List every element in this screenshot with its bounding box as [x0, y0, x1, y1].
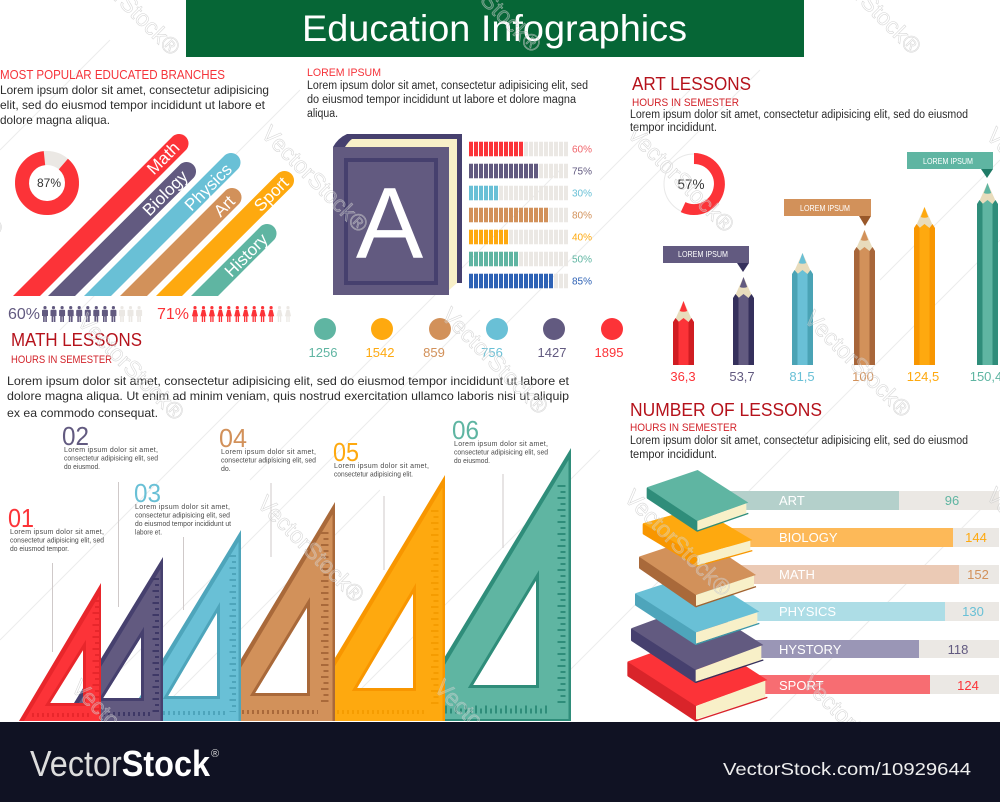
bar: hystory 118	[720, 640, 999, 658]
pencil: 81,5	[792, 253, 813, 365]
bar row 85%	[469, 276, 592, 288]
pencil: 53,7	[733, 277, 754, 365]
text block: number of lessons: tempor incididunt.	[630, 449, 717, 461]
bar: biology 144	[720, 528, 999, 547]
step 06: Lorem ipsum dolor sit amet,	[454, 441, 548, 448]
step 01	[8, 503, 104, 553]
panel: number of lessons	[627, 399, 999, 721]
step 06	[452, 415, 548, 465]
bar: hystory 118: HYSTORY	[779, 642, 842, 657]
watermarks: VectorStock®	[799, 305, 917, 422]
bar: hystory 118: 118	[948, 642, 968, 657]
subheading: hours in semester: HOURS IN SEMESTER	[632, 97, 739, 109]
pencil: 150,4	[977, 183, 998, 365]
bar: math 152: 152	[967, 567, 989, 582]
bar: sport 124	[720, 675, 999, 694]
pencil value labels: 100	[852, 369, 874, 384]
step 01: consectetur adipisicing elit, sed	[10, 538, 104, 544]
step 01: Lorem ipsum dolor sit amet,	[10, 529, 104, 536]
bar: biology	[48, 162, 196, 296]
step 01: 01	[8, 503, 34, 533]
bar: math 152	[720, 565, 999, 584]
bar: sport: Sport	[250, 173, 293, 215]
logo: vectorstock: VectorStock	[30, 743, 211, 784]
people stat: 71%: 71%	[157, 306, 189, 323]
stat dots with numbers	[309, 318, 623, 360]
text block: branches: Lorem ipsum dolor sit amet, consectetur adipisicing	[0, 83, 269, 97]
callout: teal lorem ipsum	[907, 152, 993, 178]
text block: branches	[0, 83, 269, 127]
heading: math lessons: MATH LESSONS	[11, 329, 142, 350]
step 03	[134, 478, 231, 536]
text block: lorem ipsum: aliqua.	[307, 108, 338, 120]
people stat: 71%	[157, 306, 291, 323]
text block: number of lessons: Lorem ipsum dolor sit amet, consectetur adipisicing elit, sed do eiusmod	[630, 435, 968, 447]
text block: math lessons: dolore magna aliqua. Ut enim ad minim veniam, quis nostrud exercitation ullamco laboris nisi ut aliquip	[7, 389, 569, 403]
bar: history: History	[221, 230, 272, 281]
donut chart: 57%: 57%	[677, 177, 705, 192]
heading: number of lessons: NUMBER OF LESSONS	[630, 399, 822, 420]
step 02	[62, 421, 158, 471]
book teal	[647, 470, 748, 531]
bar: math 152: MATH	[779, 567, 815, 582]
stat dots with numbers: 1542	[366, 345, 394, 360]
watermarks: VectorStock®	[436, 302, 554, 419]
book orange	[643, 508, 752, 566]
book purple	[631, 603, 763, 682]
step 02: 02	[62, 421, 89, 451]
bar row 80%: 80%	[572, 210, 592, 222]
donut chart: 57%	[664, 154, 724, 214]
step 06: 06	[452, 415, 479, 445]
bar: art 96: ART	[779, 493, 805, 508]
panel: lorem ipsum book	[307, 67, 623, 360]
stat dots with numbers: 1427	[538, 345, 566, 360]
step 04: do.	[221, 466, 231, 473]
stat dots with numbers: 1256	[309, 345, 337, 360]
bar row 30%	[469, 188, 592, 200]
bar: physics 130	[720, 602, 999, 621]
bar row 40%	[469, 232, 592, 244]
pencil: 124,5	[914, 207, 935, 365]
bar row 75%: 75%	[572, 166, 592, 178]
subheading: hours in semester: HOURS IN SEMESTER	[630, 422, 737, 434]
text block: art lessons: tempor incididunt.	[630, 122, 717, 134]
step 02: Lorem ipsum dolor sit amet,	[64, 447, 158, 454]
step 05: Lorem ipsum dolor sit amet,	[334, 463, 429, 470]
bar: history	[191, 224, 277, 296]
bar: art 96: 96	[945, 493, 959, 508]
heading: art lessons: ART LESSONS	[632, 73, 751, 94]
chart: segmented progress bars	[469, 144, 592, 288]
pencil value labels: 81,5	[789, 369, 815, 384]
text block: lorem ipsum	[307, 80, 588, 120]
step 03: Lorem ipsum dolor sit amet,	[135, 504, 230, 511]
bar: math	[13, 134, 189, 296]
bar row 40%: 40%	[572, 232, 592, 244]
people stat: 60%	[8, 306, 142, 323]
title banner	[186, 0, 804, 57]
leader lines	[52, 474, 503, 652]
bar: sport 124: 124	[957, 678, 979, 693]
callout: purple lorem ipsum	[663, 246, 749, 272]
book blue	[635, 573, 759, 644]
callout: purple lorem ipsum: LOREM IPSUM	[678, 249, 728, 259]
bar: biology 144: BIOLOGY	[779, 530, 838, 545]
step 05: consectetur adipisicing elit.	[334, 472, 413, 478]
step 03: labore et.	[135, 530, 162, 536]
step 04: consectetur adipisicing elit, sed	[221, 458, 316, 464]
bar: art	[120, 188, 242, 296]
callout: brown lorem ipsum	[784, 199, 871, 226]
set square 04 brown	[204, 502, 335, 721]
bar: physics 130: PHYSICS	[779, 604, 836, 619]
text block: art lessons	[630, 109, 968, 134]
bar: biology: Biology	[139, 167, 192, 220]
bar: sport 124: SPORT	[779, 678, 824, 693]
watermarks: VectorStock®	[619, 484, 737, 601]
icon: book with letter A	[333, 134, 462, 295]
bar: art 96	[720, 491, 999, 510]
watermarks: VectorStock®	[72, 308, 190, 425]
registered mark: ®	[211, 748, 219, 760]
image id: VectorStock.com/10929644	[723, 759, 971, 779]
text block: math lessons	[7, 374, 570, 420]
step 04: 04	[219, 423, 247, 453]
watermarks: VectorStock®	[256, 120, 374, 237]
watermarks: VectorStock®	[252, 490, 370, 607]
watermarks: VectorStock®	[66, 674, 184, 791]
watermarks: VectorStock®	[797, 669, 915, 786]
text block: branches: dolore magna aliqua.	[0, 113, 110, 127]
heading: lorem ipsum: LOREM IPSUM	[307, 67, 381, 79]
pencil: 36,3	[673, 301, 694, 365]
bar row 60%	[469, 144, 592, 156]
step 03: do eiusmod tempor incididunt ut	[135, 521, 231, 528]
people stat: 60%: 60%	[8, 306, 40, 323]
bar: physics 130: 130	[962, 604, 984, 619]
set square 05 orange	[297, 475, 445, 721]
text block: branches: elit, sed do eiusmod tempor incididunt ut labore et	[0, 98, 266, 112]
stat dots with numbers: 756	[481, 345, 503, 360]
bar row 60%: 60%	[572, 144, 592, 156]
bar row 50%: 50%	[572, 254, 592, 266]
stat dots with numbers: 1895	[595, 345, 623, 360]
pencil value labels: 124,5	[907, 369, 939, 384]
panel: most popular educated branches	[0, 68, 294, 323]
set square 02 purple	[63, 557, 163, 721]
bar row 75%	[469, 166, 592, 178]
pencil value labels: 53,7	[729, 369, 755, 384]
text block: lorem ipsum: do eiusmod tempor incididunt ut labore et dolore magna	[307, 94, 577, 106]
icon: stack of books	[627, 470, 767, 721]
set square 01 red	[19, 583, 101, 721]
donut chart: 87%	[12, 148, 82, 218]
text block: art lessons: Lorem ipsum dolor sit amet, consectetur adipisicing elit, sed do eiusmod	[630, 109, 968, 121]
heading: branches: MOST POPULAR EDUCATED BRANCHES	[0, 68, 225, 82]
step 06: consectetur adipisicing elit, sed	[454, 450, 548, 456]
step 01: do eiusmod tempor.	[10, 546, 69, 553]
bar row 30%: 30%	[572, 188, 592, 200]
bar: sport	[156, 171, 294, 296]
bar: biology 144: 144	[965, 530, 987, 545]
text block: math lessons: ex ea commodo consequat.	[7, 406, 158, 420]
watermarks: VectorStock®	[429, 674, 547, 791]
callout: teal lorem ipsum: LOREM IPSUM	[923, 156, 973, 166]
step 05	[333, 437, 429, 478]
step 02: consectetur adipisicing elit, sed	[64, 456, 158, 462]
step 02: do eiusmod.	[64, 464, 100, 471]
step 05: 05	[333, 437, 359, 467]
bar row 85%: 85%	[572, 276, 592, 288]
step 04: Lorem ipsum dolor sit amet,	[221, 449, 316, 456]
watermarks: VectorStock®	[622, 120, 740, 237]
icon: book with letter A: A	[356, 168, 424, 280]
step 03: 03	[134, 478, 161, 508]
book brown	[639, 537, 756, 607]
set square 03 blue	[125, 530, 241, 721]
bar: physics	[84, 153, 241, 296]
bar: math: Math	[143, 138, 183, 178]
text block: lorem ipsum: Lorem ipsum dolor sit amet, consectetur adipisicing elit, sed	[307, 80, 588, 92]
text block: math lessons: Lorem ipsum dolor sit amet, consectetur adipisicing elit, sed do eiusmod tempor incididunt ut labore et	[7, 374, 570, 388]
bar: physics: Physics	[181, 160, 236, 215]
bar row 80%	[469, 210, 592, 222]
title banner: Education Infographics	[302, 8, 687, 49]
bar: art: Art	[210, 192, 239, 221]
subheading: hours in semester: HOURS IN SEMESTER	[11, 354, 112, 366]
bar row 50%	[469, 254, 592, 266]
text block: number of lessons	[630, 435, 968, 461]
step 04	[219, 423, 316, 473]
book red	[627, 636, 767, 721]
donut chart: 87%: 87%	[37, 176, 61, 190]
pencil value labels	[670, 369, 1000, 384]
pencil: 100	[854, 230, 875, 365]
panel: art lessons	[630, 73, 1000, 384]
step 06: do eiusmod.	[454, 458, 490, 465]
step 03: consectetur adipisicing elit, sed	[135, 512, 230, 520]
stat dots with numbers: 859	[423, 345, 445, 360]
set square 06 teal	[406, 448, 571, 721]
callout: brown lorem ipsum: LOREM IPSUM	[800, 203, 850, 213]
pencil value labels: 36,3	[670, 369, 696, 384]
footer band	[0, 722, 1000, 802]
panel: math lessons	[7, 329, 571, 721]
